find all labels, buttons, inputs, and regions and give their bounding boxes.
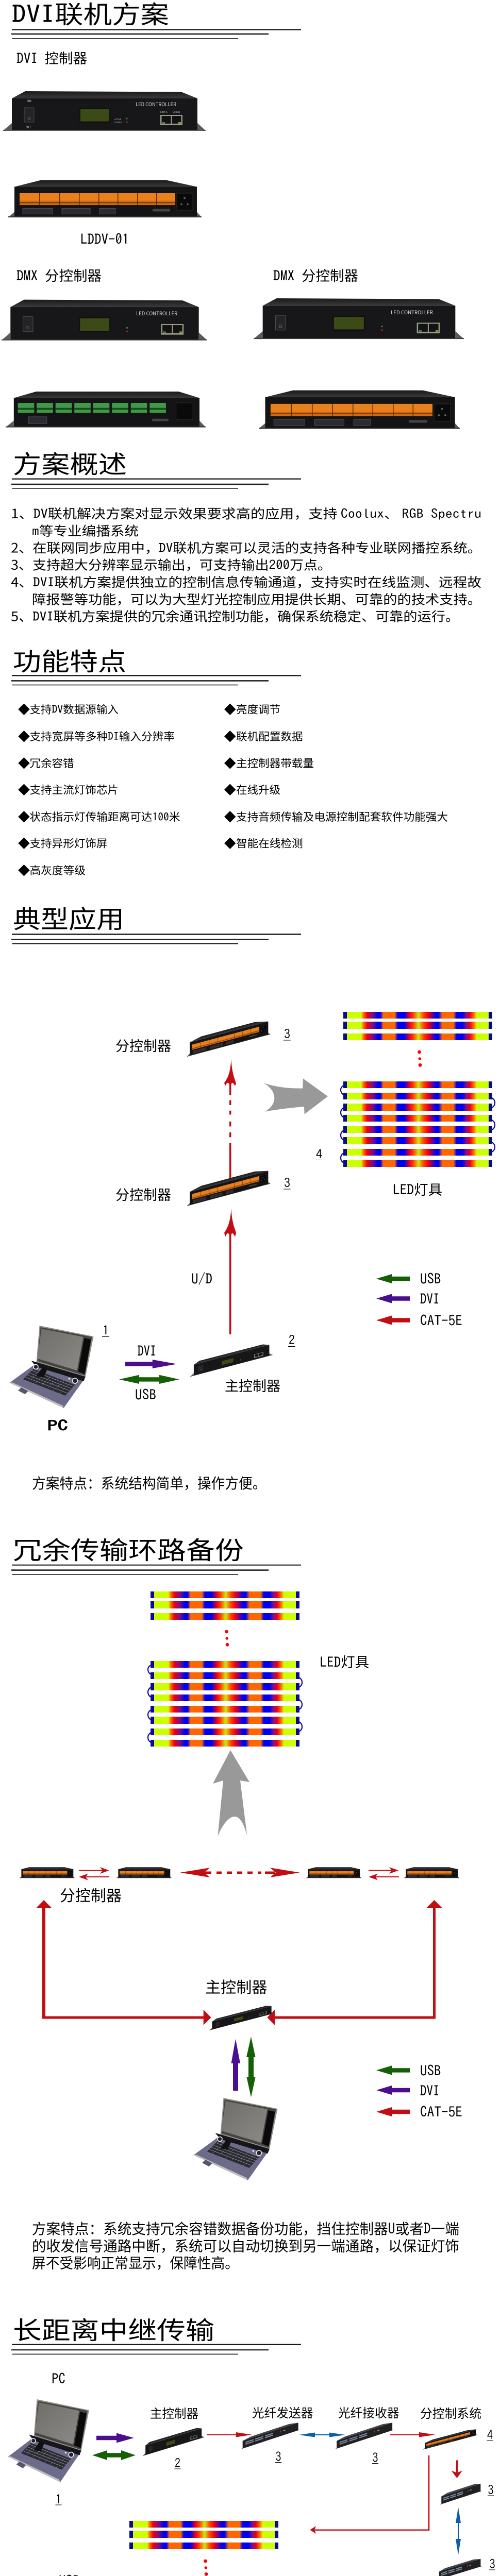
arrow: blue fiber double [299,2433,345,2437]
feature list: left column: 支持宽屏等多种DI输入分辨率 [30,728,175,744]
feature list: right column: 亮度调节 [236,702,280,717]
feature list: left column: 支持主流灯饰芯片 [30,782,119,798]
device: DVI controller front [3,91,206,131]
device: DMX sub controller front left: LED CONTROLLER [136,309,178,317]
device: fiber transmitter [241,2420,299,2449]
text block: overview list: 4、DVI联机方案提供独立的控制信息传输通道，支持实时在线监测、远程故 [11,572,481,591]
arrow: green double USB [246,2037,256,2097]
legend: cable types [376,1272,462,1328]
number labels: top row: 1 [56,2493,61,2506]
feature list: left column: 支持异形灯饰屏 [30,836,107,851]
device: sub controller system [423,2428,477,2450]
feature list: left column: ◆ [18,834,30,851]
feature list: left column: ◆ [18,726,30,744]
device: fiber transmitter lower [440,2482,481,2504]
label: 主控制器: 主控制器 [205,1975,267,1997]
label: 主控制器: 主控制器 [225,1375,280,1395]
device: sub controller upper [187,1018,270,1057]
feature list: right column: ◆ [224,700,236,717]
device: sub controller lower [187,1167,270,1206]
arrows: left pair [79,1867,399,1880]
icon: laptop PC [9,1326,94,1408]
feature list: right column: ◆ [224,780,236,798]
device: DMX sub controller front left [2,300,207,341]
label: DVI: DVI [138,1344,156,1358]
text: scheme feature paragraph: 屏不受影响正常显示，保障性高。 [32,2252,239,2273]
label: U/D: U/D [191,1272,212,1286]
text block: overview list: 1、DV联机解决方案对显示效果要求高的应用，支持 Coolux 、 RGB Spectru [11,504,481,522]
device: DMX sub controller front right: LED CONTROLLER [391,308,434,316]
arrow: dashed red up to upper sub controller [224,1059,236,1178]
arrow: purple up DVI [231,2039,240,2091]
label: 分控制器 upper: 分控制器 [115,1035,171,1055]
device: DMX sub controller rear, green terminals [6,392,206,428]
feature list: left column: 支持DV数据源输入 [30,702,119,717]
text block: overview list: 障报警等功能，可以为大型灯光控制应用提供长期、可靠的的技术支持。 [32,589,481,608]
feature list: right column: 在线升级 [236,782,280,798]
device: DVI controller front: POWER [114,121,122,124]
heading: 典型应用: 典型应用 [13,899,124,935]
heading: 方案概述: 方案概述 [13,444,127,480]
labels: device names: 分控制系统 [420,2403,481,2421]
legend: cable types: DVI [420,1292,439,1306]
LED fixture panel [127,2521,281,2576]
LED fixture panel [148,1591,302,1747]
device: DVI controller front: ON [27,98,31,103]
arrow: blue vertical double [456,2507,461,2555]
arrow: purple DVI [125,1360,177,1368]
number 3: 3 [490,2558,495,2571]
device: DVI controller rear [8,180,202,217]
arrow: green USB double [92,2450,136,2460]
feature list: right column: 联机配置数据 [236,728,303,744]
labels: device names: 主控制器 [150,2403,198,2421]
device: DVI controller front: LINK B [173,111,180,114]
feature list: left column: 状态指示灯传输距离可达 100米 [30,809,180,824]
arrow: red to transmitter [207,2432,252,2437]
arrow: red down [452,2460,462,2478]
device: DVI controller front: ACTIVE [114,118,122,121]
legend: cable types: USB [420,2064,441,2078]
device: DMX sub controller rear, orange terminals [259,391,460,429]
text: scheme feature paragraph: 方案特点：系统支持冗余容错数据备份功能，挡住控制器U或者D一端 [32,2218,459,2239]
device: master controller [209,2004,274,2030]
device: DVI controller front: OFF [26,125,32,129]
legend: cable types [376,2064,462,2119]
text block: overview list: 3、支持超大分辨率显示输出，可支持输出 200万点。 [11,555,331,574]
device: master controller [143,2426,204,2456]
feature list: right column: ◆ [224,753,236,771]
feature list: left column: 高灰度等级 [30,862,86,878]
legend: cable types: CAT-5E [420,2105,462,2119]
label: PC: PC [52,2372,65,2386]
LED fixture panel [341,1012,495,1167]
labels: device names [150,2403,481,2421]
label: PC: PC [47,1419,68,1433]
label: 分控制器: 分控制器 [60,1883,122,1906]
feature list: left column [18,700,180,878]
number labels: top row: 4 [487,2429,493,2442]
label: LDDV-01: LDDV-01 [80,232,129,246]
feature list: left column: ◆ [18,780,30,798]
feature list: right column: 支持音频传输及电源控制配套软件功能强大 [236,809,448,824]
labels: device names: 光纤接收器 [338,2403,399,2421]
arrow: dashed red double between sub controllers [180,1868,300,1877]
text block: overview list: 2、在联网同步应用中， DV联机方案可以灵活的支持各种专业联网播控系统。 [11,538,481,556]
device: fiber receiver [335,2420,394,2449]
arrow: red up from master to sub controller [224,1208,236,1334]
feature list: right column: ◆ [224,726,236,744]
number 3: 3 [488,2484,494,2497]
number 3 lower: 3 [284,1177,290,1190]
number 1: 1 [103,1324,109,1337]
device: DVI controller front: LED CONTROLLER [136,100,177,108]
arrow: green USB double [119,1375,179,1384]
arrow: big grey up [213,1750,249,1836]
text block: overview list: m等专业编播系统 [32,521,139,540]
labels: device names: 光纤发送器 [252,2403,313,2421]
icon: laptop PC [8,2399,89,2482]
feature list: left column: 冗余容错 [30,755,74,771]
label: DMX 分控制器 left: DMX 分控制器 [16,265,102,285]
legend: cable types: DVI [420,2084,439,2098]
label: USB: USB [135,1388,156,1402]
feature list: left column: ◆ [18,700,30,717]
device: fiber receiver lower [438,2557,481,2576]
devices: sub controllers row with link arrows [20,1867,459,1880]
number labels: top row: 3 [372,2451,378,2465]
feature list: left column: ◆ [18,860,30,878]
label: 分控制器 lower: 分控制器 [115,1184,171,1204]
icon: laptop PC [194,2098,277,2180]
text: scheme feature paragraph [32,2218,459,2273]
feature list: left column: ◆ [18,807,30,824]
text: scheme feature paragraph: 的收发信号通路中断，系统可以自动切换到另一端通路，以保证灯饰 [32,2235,459,2256]
number labels: top row [56,2429,493,2506]
arrow: red L line to LED panel [310,2455,429,2534]
legend: cable types: CAT-5E [420,1314,462,1328]
arrow: red loop right [267,1900,442,2025]
label: LED灯具: LED灯具 [320,1651,369,1671]
feature list: left column: ◆ [18,753,30,771]
arrow: purple DVI [96,2433,134,2443]
label: DVI 控制器: DVI 控制器 [16,47,87,67]
device: master controller [190,1342,273,1377]
device: DMX sub controller front right [254,298,464,339]
device: DVI controller front: LINK A [160,111,168,114]
heading: 长距离中继传输: 长距离中继传输 [13,2310,214,2346]
arrow: red to sub system [390,2432,435,2437]
number 4: 4 [316,1148,322,1161]
feature list: right column: 主控制器带载量 [236,755,314,771]
label: LED灯具: LED灯具 [393,1179,442,1199]
feature list: right column: ◆ [224,834,236,851]
legend: cable types: USB [420,1272,441,1286]
text block: overview list: 5、DVI联机方案提供的冗余通讯控制功能，确保系统稳定、可靠的运行。 [11,607,459,625]
number 3 upper: 3 [284,1028,290,1041]
feature list: right column [224,700,448,851]
text: scheme feature: 方案特点：系统结构简单，操作方便。 [32,1472,266,1493]
heading: 功能特点: 功能特点 [13,641,126,677]
heading: 冗余传输环路备份: 冗余传输环路备份 [13,1530,244,1566]
label: DMX 分控制器 right: DMX 分控制器 [273,265,358,285]
arrow: grey curved to LED [263,1078,328,1114]
number labels: top row: 2 [175,2457,180,2470]
number 2: 2 [289,1334,295,1347]
feature list: right column: 智能在线检测 [236,836,303,851]
number labels: top row: 3 [275,2450,281,2464]
feature list: right column: ◆ [224,807,236,824]
text block: overview list [11,504,481,625]
arrow: red loop left [36,1900,211,2025]
